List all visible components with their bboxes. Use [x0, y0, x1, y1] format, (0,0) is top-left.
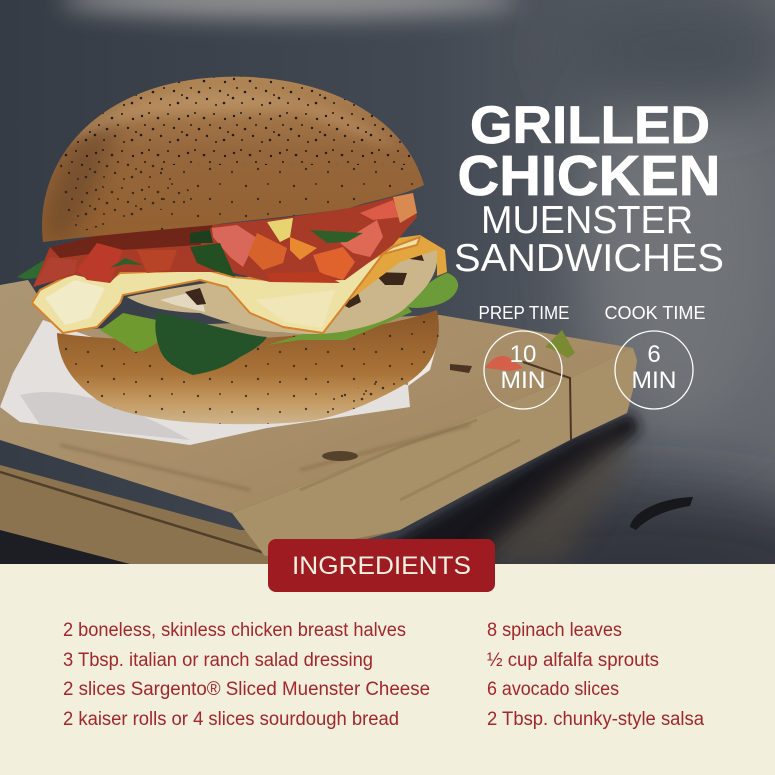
cook time badge: COOK TIME [604, 303, 706, 323]
ingredients list: right column: 2 Tbsp. chunky-style salsa [487, 709, 704, 730]
title: recipe name: GRILLED [470, 96, 710, 155]
ingredients heading button: INGREDIENTS [292, 552, 471, 580]
prep time badge: MIN [500, 367, 546, 394]
chicken [127, 250, 437, 334]
prep time badge: 10 [510, 341, 536, 368]
ingredients list: left column: 2 slices Sargento® Sliced Muenster Cheese [63, 679, 430, 700]
ingredients heading button [268, 539, 495, 592]
seed band on lower bun right [320, 372, 408, 415]
ingredients list: left column: 3 Tbsp. italian or ranch salad dressing [63, 650, 373, 671]
ingredients list: left column: 2 boneless, skinless chicken breast halves [63, 620, 406, 641]
title: recipe name: CHICKEN [458, 144, 720, 208]
tomato piece on board [485, 356, 523, 371]
ingredients list: right column [487, 620, 704, 730]
cheese [32, 237, 420, 333]
lettuce left [100, 313, 157, 352]
salsa pieces [212, 225, 257, 267]
ingredients list: right column: 6 avocado slices [487, 679, 619, 700]
ingredients list: left column: 2 kaiser rolls or 4 slices sourdough bread [63, 709, 399, 730]
cook time badge: MIN [632, 367, 676, 394]
cook time badge: 6 [647, 341, 661, 368]
front face [232, 348, 637, 556]
paper under burger [0, 320, 410, 445]
ingredients panel background [0, 564, 775, 775]
prep time badge: PREP TIME [478, 303, 570, 323]
background: dark slate surface [0, 0, 775, 564]
wooden cutting board [0, 280, 637, 566]
orange cheese sheet right [350, 235, 447, 300]
surface crumbs [630, 497, 693, 530]
shadow and reflection under the board [360, 412, 640, 564]
spinach [155, 313, 267, 375]
burger [0, 75, 458, 445]
green spread right [267, 306, 412, 345]
prep time badge [478, 303, 570, 409]
top bun [42, 77, 424, 242]
salsa base [33, 193, 417, 287]
cook time badge [604, 303, 706, 409]
grill marks [185, 250, 424, 308]
title: recipe name: MUENSTER [481, 199, 693, 242]
lower plank [0, 465, 400, 566]
title: recipe name [454, 96, 724, 280]
ingredients list: right column: 8 spinach leaves [487, 620, 622, 641]
title: recipe name: SANDWICHES [454, 237, 724, 280]
ingredients list: left column [63, 620, 430, 730]
top surface [0, 280, 633, 513]
bottom bun [57, 310, 439, 424]
bottom left floor shadow [0, 530, 140, 564]
green chip on board [545, 330, 575, 358]
ingredients list: right column: ½ cup alfalfa sprouts [487, 650, 659, 671]
